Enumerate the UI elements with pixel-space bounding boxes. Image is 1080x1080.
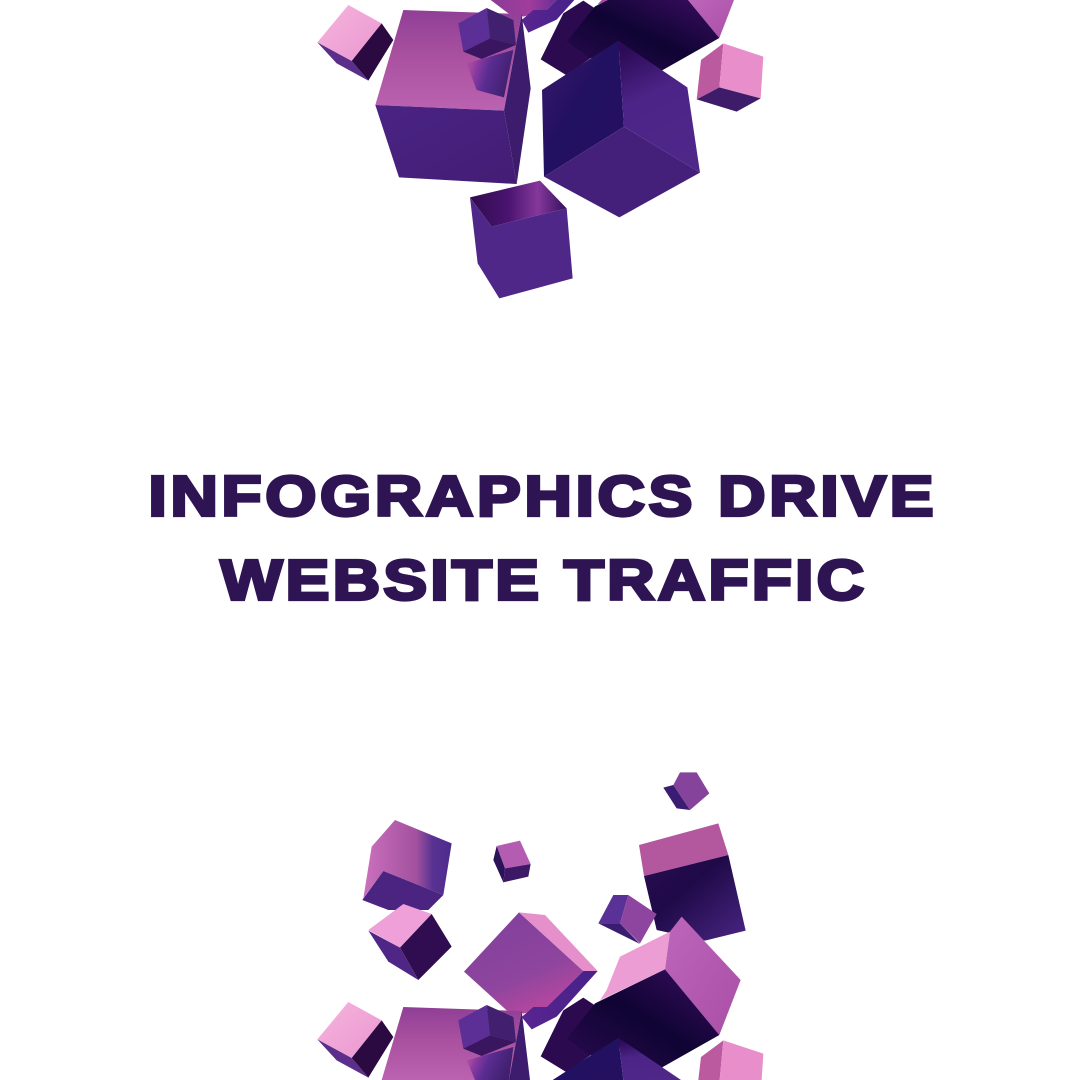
title xyxy=(148,464,933,612)
cube: tall right xyxy=(639,823,746,941)
cube: dark rear xyxy=(541,998,595,1072)
title line 2: WEBSITE TRAFFIC xyxy=(220,548,864,612)
cube: tiny top right xyxy=(663,772,709,810)
title line 1: INFOGRAPHICS DRIVE xyxy=(148,464,933,528)
cube: big purple xyxy=(375,10,531,184)
cube: pink left middle xyxy=(368,904,452,980)
cube: small pink left xyxy=(317,5,393,81)
cube: large navy xyxy=(542,41,700,217)
cube: small violet on top xyxy=(458,8,516,59)
bottom cube cluster xyxy=(317,772,763,1080)
cube: pink right xyxy=(698,1040,763,1080)
cube: upper left xyxy=(362,820,452,910)
cube: large dark and pink xyxy=(567,0,734,71)
cube: big purple xyxy=(382,1007,530,1080)
top cube cluster xyxy=(317,0,763,298)
cube: centre diamond xyxy=(464,912,598,1029)
cube: tiny centre xyxy=(493,841,531,882)
cube: centre diamond remnant xyxy=(491,0,574,33)
cube: pink right xyxy=(697,43,763,112)
cube: dark rear xyxy=(541,1,595,75)
cube: small pink left xyxy=(317,1002,393,1078)
cube: large dark and pink xyxy=(567,917,741,1068)
cube: lower open top xyxy=(470,181,573,298)
cube: large navy xyxy=(553,1038,681,1080)
cube: small right xyxy=(598,895,657,944)
cube: small violet on top xyxy=(458,1005,516,1056)
